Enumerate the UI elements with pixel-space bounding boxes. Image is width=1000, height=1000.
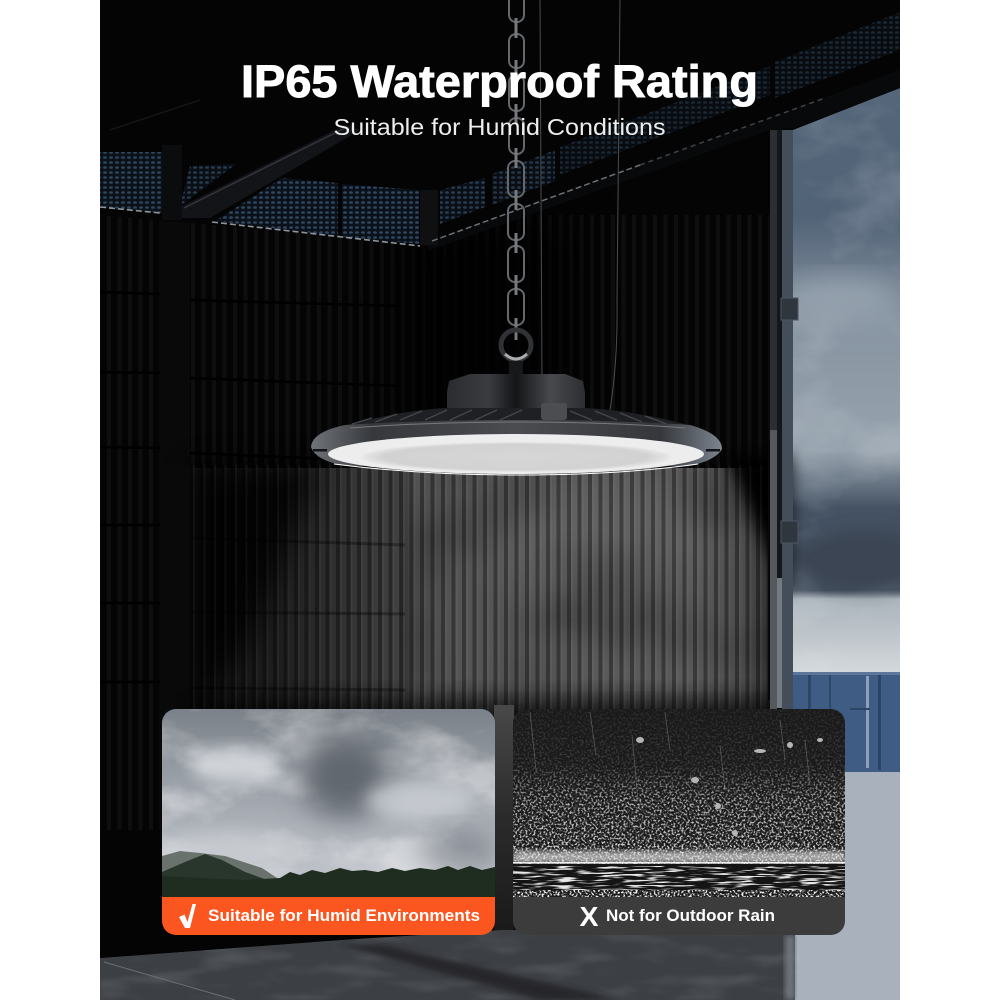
label: suitable: Suitable for Humid Environments — [208, 906, 480, 925]
infographic canvas — [100, 0, 900, 1000]
hanging chain — [508, 0, 524, 340]
lamp driver housing — [447, 374, 585, 410]
wet reflective indoor floor — [100, 930, 800, 1000]
LED lens panel — [328, 434, 704, 474]
label: not suitable: Not for Outdoor Rain — [606, 906, 775, 925]
icon: X mark: X — [580, 901, 599, 932]
subtitle: Suitable for Humid Conditions — [334, 114, 666, 140]
icon: check mark — [179, 904, 196, 928]
card: not for outdoor rain — [513, 709, 845, 935]
door column and hinges — [770, 130, 798, 710]
sky seen through the open doorway — [793, 88, 900, 672]
cooling fins — [336, 408, 700, 428]
corrugated warehouse wall — [100, 215, 770, 840]
eye bolt — [501, 330, 531, 377]
clip on fins — [541, 403, 567, 420]
thin suspension wires — [540, 0, 620, 410]
photo: cloudy sky over hills — [160, 709, 500, 899]
ceiling with perforated blue panels — [100, 0, 900, 250]
photo: heavy rain on ground — [513, 709, 845, 897]
shipping containers outside — [793, 672, 900, 772]
dark label bar — [513, 897, 845, 935]
title: IP65 Waterproof Rating — [241, 56, 758, 107]
wet floor outside — [790, 772, 900, 1000]
orange label bar — [162, 897, 495, 935]
fog and light beam below the lamp — [160, 440, 793, 930]
high bay UFO lamp — [311, 330, 722, 475]
card: suitable for humid environments — [160, 709, 500, 935]
outer metal rim — [311, 420, 722, 466]
